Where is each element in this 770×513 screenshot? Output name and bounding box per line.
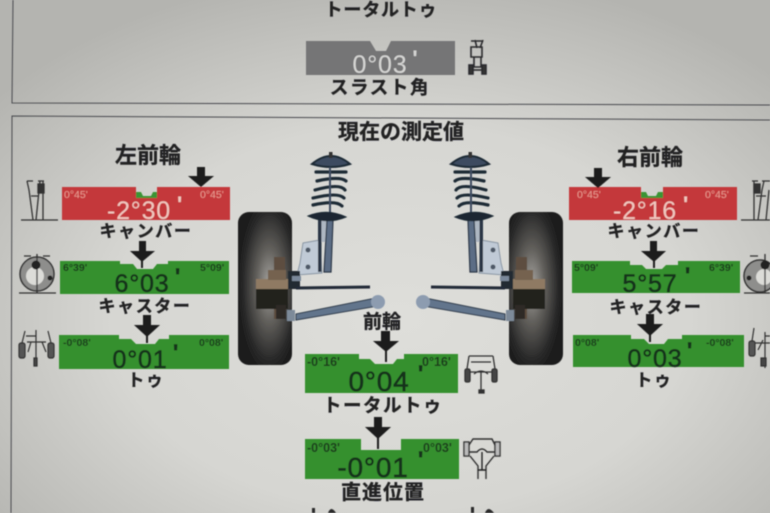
gauge: left toe: -0°08' <box>63 337 91 349</box>
arrow: left toe <box>134 315 160 343</box>
heading: total toe (upper): トータルトゥ <box>325 0 437 20</box>
gauge: left caster <box>60 261 229 298</box>
right knuckle <box>500 271 513 289</box>
gauge: thrust angle: 0°03 <box>353 51 407 79</box>
left spring <box>308 152 350 221</box>
label: total toe: トータルトゥ <box>323 395 443 416</box>
left hub <box>256 257 288 319</box>
gauge: right toe: 0°08' <box>575 337 599 349</box>
icon: right caster <box>744 254 770 293</box>
gauge: right toe: ' <box>687 338 693 363</box>
gauge: right camber: 0°45' <box>577 189 601 201</box>
right bracket <box>479 240 504 275</box>
label: right camber: キャンバー <box>608 222 700 241</box>
icon: right toe <box>749 328 770 368</box>
left bracket <box>297 240 322 275</box>
arrow: right toe <box>637 314 663 342</box>
icon: left toe <box>19 330 54 366</box>
left lower arm <box>287 295 385 321</box>
gauge: straight ahead position: -0°03' <box>307 441 340 455</box>
gauge: right caster <box>572 261 740 298</box>
gauge: left caster: ' <box>175 264 181 289</box>
gauge: straight ahead position: ' <box>418 447 424 472</box>
bottom cropped icons <box>312 507 494 513</box>
gauge: total toe: 0°04 <box>348 366 410 397</box>
heading: right front wheel: 右前輪 <box>617 145 683 170</box>
gauge: left toe: 0°08' <box>199 337 223 349</box>
illustration: right suspension and wheel <box>416 152 563 365</box>
gauge: left caster: 6°03 <box>115 270 169 298</box>
left tie rod <box>296 287 370 288</box>
gauge: right caster: 5°09' <box>574 262 598 274</box>
icon: straight ahead position <box>464 439 500 479</box>
left tire <box>238 212 292 365</box>
gauge: right toe <box>573 335 744 373</box>
gauge: straight ahead position: 0°03' <box>423 441 452 455</box>
gauge: left camber: 0°45' <box>64 189 88 201</box>
gauge: left caster: 6°39' <box>63 262 87 274</box>
icon: total toe <box>465 356 497 393</box>
right hub <box>513 257 545 319</box>
gauge: left toe <box>59 335 229 374</box>
label: right caster: キャスター <box>610 298 702 317</box>
gauge: right caster: 5°57 <box>623 270 677 298</box>
right spring <box>451 152 493 221</box>
gauge: left toe: 0°01 <box>113 346 167 374</box>
arrow: straight ahead position <box>365 417 391 449</box>
right tire <box>509 212 563 365</box>
gauge: left caster: 5°09' <box>200 262 224 274</box>
label: left camber: キャンバー <box>100 222 192 241</box>
gauge: right toe: 0°03 <box>628 345 682 373</box>
heading: front wheels: 前輪 <box>363 311 401 333</box>
left strut <box>318 218 333 272</box>
right strut <box>468 218 483 272</box>
gauge: total toe <box>305 354 458 397</box>
gauge: left toe: ' <box>173 340 179 365</box>
right lower arm <box>416 295 514 321</box>
label: thrust angle: スラスト角 <box>330 77 430 98</box>
label: left toe: トゥ <box>127 371 165 390</box>
gauge: right camber <box>569 187 737 225</box>
gauge: thrust angle: ' <box>412 46 418 71</box>
arrow: right camber <box>585 168 611 188</box>
gauge: left camber <box>62 187 230 225</box>
gauge: total toe: -0°16' <box>307 355 340 369</box>
gauge: right caster: 6°39' <box>709 262 733 274</box>
left knuckle <box>288 271 301 289</box>
gauge: left camber: -2°30 <box>107 197 171 225</box>
panel: current measurements <box>11 116 770 513</box>
arrow: left camber <box>188 167 214 187</box>
heading: left front wheel: 左前輪 <box>115 143 181 168</box>
panel: upper frame <box>12 0 770 105</box>
icon: right camber <box>741 181 770 220</box>
gauge: right toe: -0°08' <box>706 337 734 349</box>
icon: thrust vehicle <box>469 40 486 74</box>
heading: current measured values: 現在の測定値 <box>338 121 464 144</box>
gauge: total toe: ' <box>418 361 424 386</box>
arrow: total toe <box>373 331 399 362</box>
gauge: straight ahead position <box>305 439 459 483</box>
gauge: left camber: 0°45' <box>200 189 224 201</box>
label: right toe: トゥ <box>635 371 673 390</box>
icon: left camber <box>21 181 58 220</box>
gauge: total toe: 0°16' <box>422 355 451 369</box>
gauge: right caster: ' <box>685 263 691 288</box>
label: straight ahead position: 直進位置 <box>341 481 425 504</box>
gauge: right camber: -2°16 <box>613 197 677 225</box>
gauge: straight ahead position: -0°01 <box>337 452 409 483</box>
gauge: right camber: ' <box>683 192 689 217</box>
arrow: right caster <box>641 241 666 268</box>
gauge: right camber: 0°45' <box>705 189 729 201</box>
gauge: thrust angle <box>306 41 455 79</box>
icon: left caster <box>19 254 56 293</box>
label: left caster: キャスター <box>98 297 192 316</box>
illustration: left suspension and wheel <box>238 152 385 365</box>
right tie rod <box>431 287 505 288</box>
arrow: left caster <box>130 241 155 268</box>
gauge: left camber: ' <box>177 192 183 217</box>
